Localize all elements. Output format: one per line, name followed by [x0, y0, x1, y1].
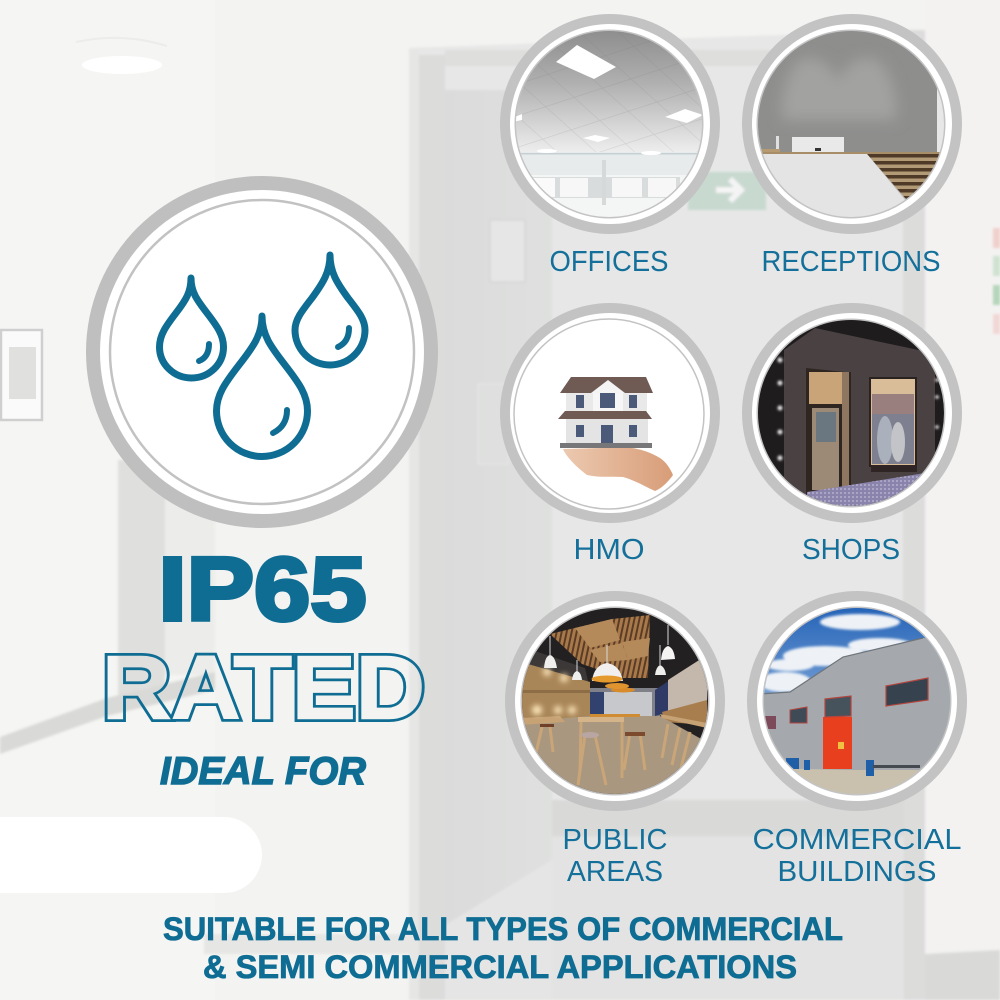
- label: receptions: RECEPTIONS: [762, 246, 940, 278]
- photo: shop front: [758, 320, 944, 506]
- panel: shops: [742, 303, 962, 523]
- icon: house on a hand: [558, 377, 673, 491]
- icon: three water drops: [160, 255, 365, 457]
- panel: IP65 water drops badge: [86, 176, 438, 528]
- label: HMO: HMO: [574, 534, 644, 566]
- label: public areas: PUBLIC: [562, 824, 668, 856]
- label: offices: OFFICES: [550, 246, 668, 278]
- photo: industrial building: [764, 608, 950, 794]
- photo: office ceiling: [516, 31, 702, 217]
- heading: IDEAL FOR: IDEAL FOR: [160, 750, 366, 793]
- panel: public areas: [505, 591, 725, 811]
- footer text: [163, 911, 843, 985]
- label: shops: SHOPS: [802, 534, 900, 566]
- label: commercial buildings: COMMERCIAL: [752, 824, 962, 856]
- footer text: & SEMI COMMERCIAL APPLICATIONS: [203, 949, 797, 985]
- label: public areas: [562, 824, 668, 888]
- heading: IP65: IP65: [158, 540, 366, 640]
- photo: restaurant interior: [522, 608, 708, 794]
- panel: offices: [500, 14, 720, 234]
- footer text: SUITABLE FOR ALL TYPES OF COMMERCIAL: [163, 911, 843, 947]
- white pill: [0, 817, 262, 893]
- panel: commercial buildings: [747, 591, 967, 811]
- panel: HMO: [500, 303, 720, 523]
- label: public areas: AREAS: [567, 856, 663, 888]
- heading: RATED outlined: RATED: [102, 638, 425, 738]
- panel: receptions: [742, 14, 962, 234]
- label: commercial buildings: [752, 824, 962, 888]
- photo: reception desk: [758, 31, 944, 217]
- label: commercial buildings: BUILDINGS: [778, 856, 936, 888]
